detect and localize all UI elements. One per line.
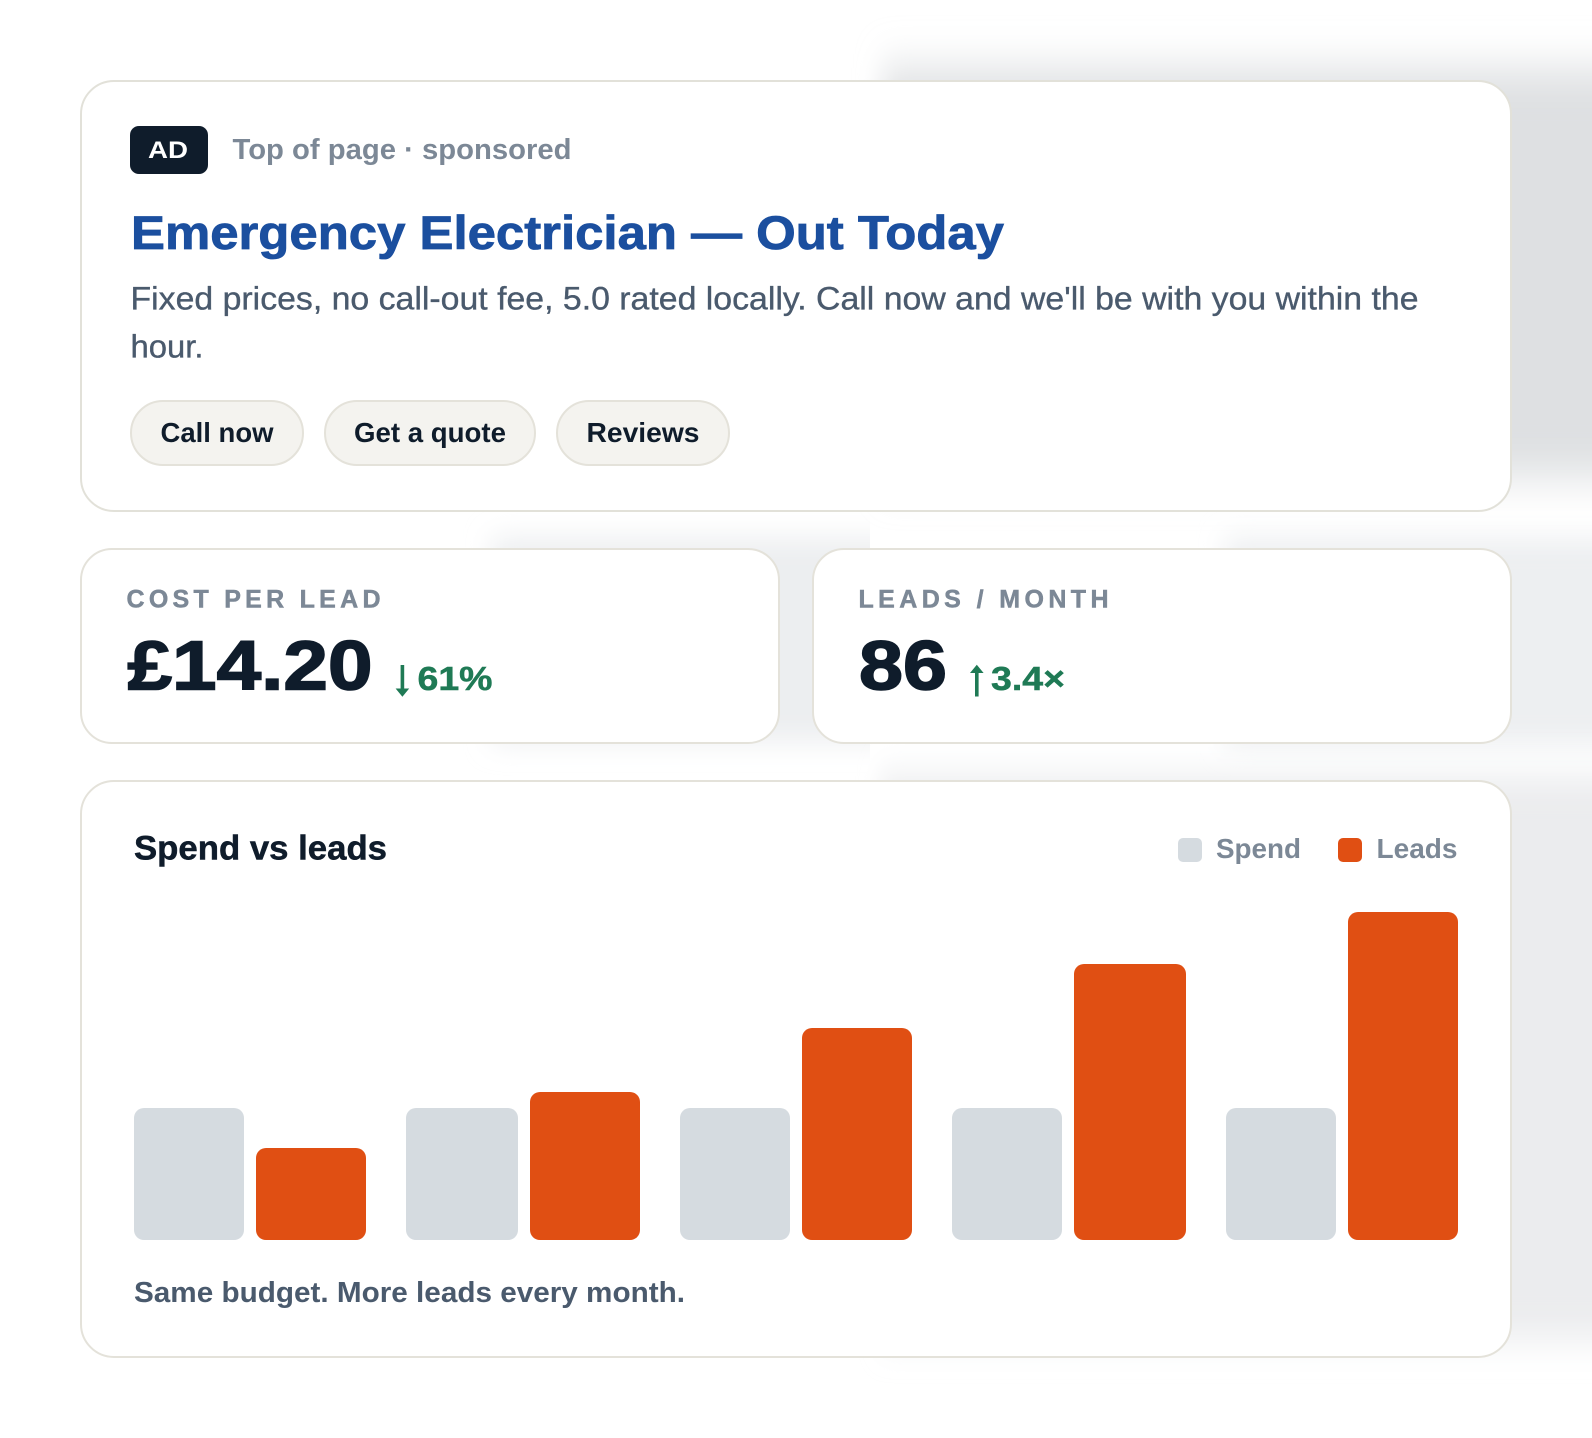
- icon: up arrow: [970, 665, 984, 696]
- button: reviews: [557, 401, 729, 465]
- panel: spend vs leads chart: [81, 781, 1511, 1357]
- ad badge: [130, 126, 208, 174]
- button: call now: Call now: [160, 417, 274, 448]
- ad headline: Emergency Electrician — Out Today: [131, 206, 1004, 259]
- button: get a quote: [325, 401, 535, 465]
- legend: [1178, 833, 1458, 864]
- metric value: 86: [859, 626, 947, 704]
- ad badge: AD: [148, 137, 188, 164]
- ad description: hour.: [130, 328, 204, 364]
- legend: Spend: [1216, 833, 1301, 864]
- chart caption: Same budget. More leads every month.: [134, 1277, 685, 1309]
- metric change: 3.4×: [991, 660, 1065, 697]
- button: get a quote: Get a quote: [354, 417, 506, 448]
- panel: leads per month metric: [813, 549, 1511, 743]
- button: call now: [131, 401, 303, 465]
- ad description: Fixed prices, no call-out fee, 5.0 rated locally. Call now and we'll be with you within the: [130, 280, 1418, 316]
- metric value: £14.20: [128, 626, 372, 704]
- metric label: LEADS / MONTH: [858, 586, 1108, 614]
- ad description: [130, 280, 1418, 364]
- chart title: Spend vs leads: [134, 830, 387, 868]
- bar chart: [134, 912, 1458, 1240]
- panel: sponsored ad card: [81, 81, 1511, 511]
- metric change: 61%: [418, 660, 492, 697]
- ad placement label: Top of page · sponsored: [232, 134, 572, 166]
- panel: cost per lead metric: [81, 549, 779, 743]
- legend: Leads: [1376, 833, 1458, 864]
- icon: down arrow: [396, 665, 409, 697]
- metric label: COST PER LEAD: [126, 586, 380, 614]
- button: reviews: Reviews: [586, 417, 700, 448]
